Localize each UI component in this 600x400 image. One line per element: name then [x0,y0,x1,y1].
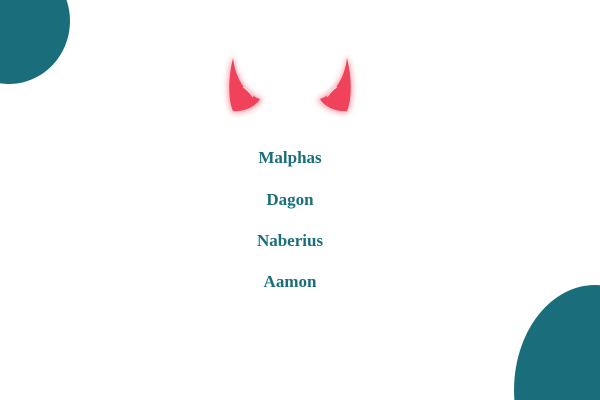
name: Dagon: Dagon [266,190,314,209]
decorative blob: bottom-right [514,285,600,400]
name: Naberius: Naberius [257,231,323,250]
right horn [317,55,352,113]
decorative blob: top-left [0,0,70,84]
left horn [228,55,263,113]
name: Malphas: Malphas [258,148,322,167]
icon: devil horns [228,55,352,113]
name: Aamon: Aamon [264,272,316,291]
